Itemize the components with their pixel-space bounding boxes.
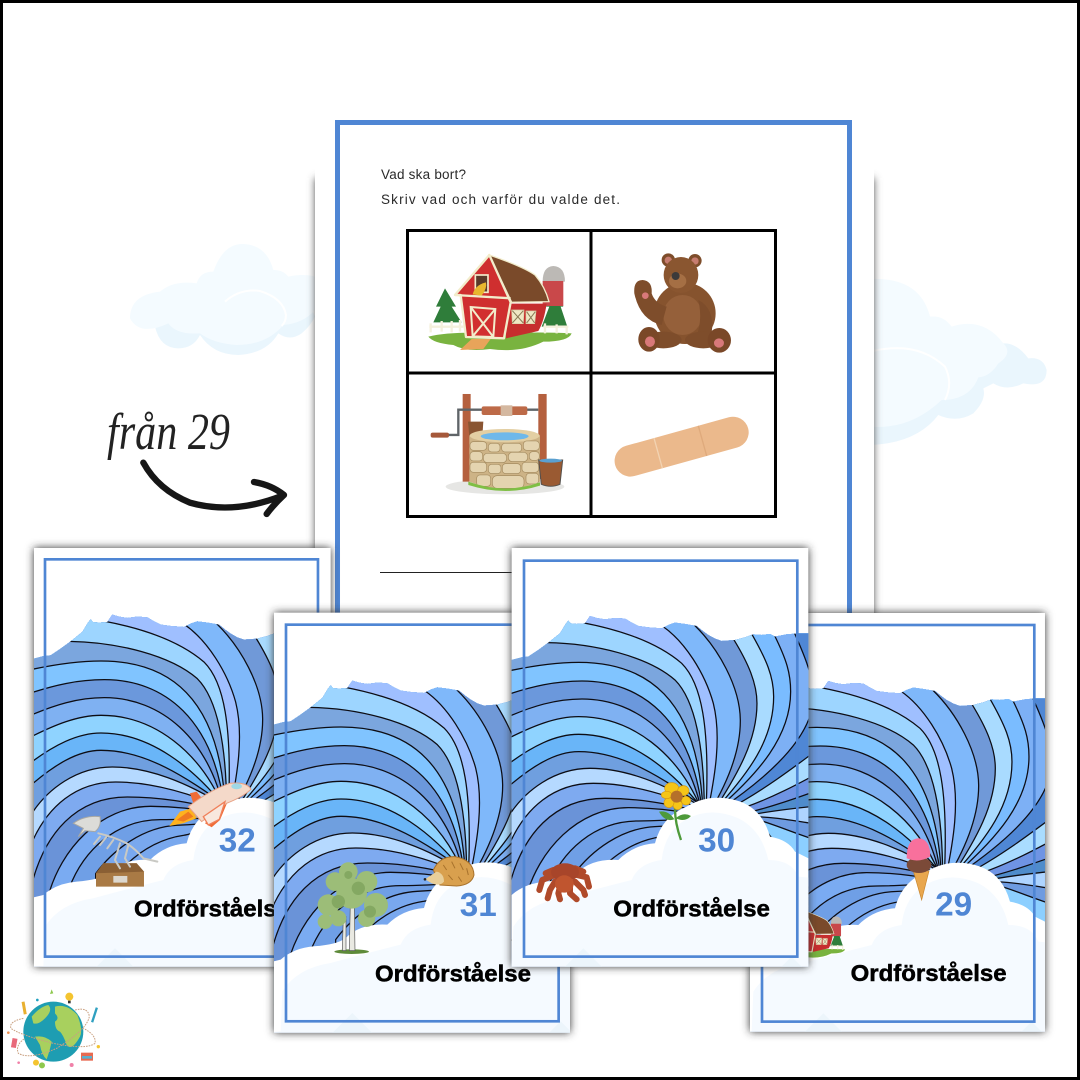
answer line: [380, 572, 520, 573]
icon: rocket: [169, 783, 251, 827]
card title: Ordförståelse: [851, 960, 1007, 986]
logo: globe: [7, 989, 100, 1068]
card number: 31: [460, 887, 497, 924]
cloud: left background: [130, 244, 315, 355]
card 29: [742, 606, 1052, 1039]
swirl background: [274, 680, 570, 1033]
card title: Ordförståelse: [375, 961, 531, 987]
icon: ice cream: [907, 838, 931, 900]
inner border: [45, 559, 318, 957]
inner border: [286, 625, 559, 1021]
swirl background: [34, 614, 274, 967]
inner border: [762, 625, 1034, 1022]
handwritten label: från 29: [107, 404, 230, 461]
swirl background: [512, 616, 808, 967]
card number: 30: [698, 823, 735, 860]
worksheet instructions: Skriv vad och varför du valde det.: [381, 192, 620, 207]
card number: 29: [935, 887, 972, 924]
inner border: [524, 561, 797, 957]
card 31: [266, 605, 578, 1040]
icon: dinosaur skeleton on box: [73, 816, 157, 887]
icon: bear: [634, 253, 731, 353]
card 30: [504, 540, 816, 974]
cloud: right background: [870, 279, 1047, 445]
worksheet page: [315, 100, 874, 650]
icon: hedgehog: [424, 857, 474, 886]
icon: flower: [659, 783, 691, 840]
icon: spider: [539, 863, 589, 899]
icon: barn: [428, 255, 572, 350]
worksheet instructions: Vad ska bort?: [381, 167, 466, 182]
icon: well: [431, 394, 564, 494]
icon: bandage: [611, 413, 752, 480]
icon: birch trees: [318, 862, 388, 954]
card title: Ordförståelse: [134, 896, 290, 922]
worksheet instructions: [381, 167, 620, 207]
swirl background: [750, 681, 1045, 1032]
card title: Ordförståelse: [613, 896, 770, 922]
card 32: [26, 540, 338, 974]
worksheet blue frame: [338, 122, 850, 642]
arrow: [143, 463, 284, 514]
card number: 32: [219, 823, 256, 860]
icon: small barn: [775, 911, 845, 958]
picture grid: [408, 230, 776, 516]
